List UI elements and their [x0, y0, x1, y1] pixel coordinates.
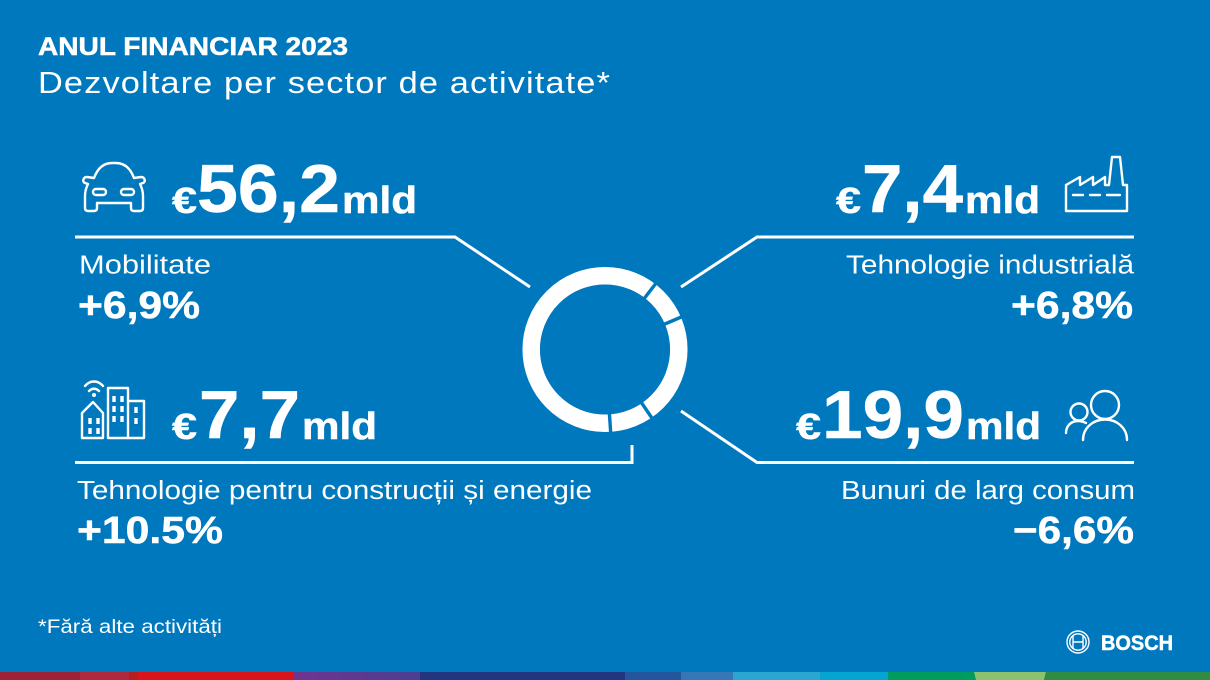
change: building and energy technology: +10.5% [77, 510, 223, 552]
amount: mobility: mld [342, 180, 417, 222]
connector: industrial technology [681, 237, 1134, 287]
amount: industrial technology [836, 151, 1040, 227]
amount: consumer goods: € [796, 406, 821, 447]
icon: factory [1066, 157, 1127, 211]
colour strip [0, 672, 1210, 680]
panel: mobility [75, 151, 530, 327]
amount: building and energy technology [172, 377, 377, 453]
connector: consumer goods [681, 411, 1134, 462]
amount: mobility: € [172, 180, 197, 221]
connector: building and energy technology [75, 445, 632, 462]
amount: building and energy technology: mld [302, 406, 377, 448]
footnote: *Fără alte activități [38, 616, 222, 638]
logo: Bosch [1067, 631, 1173, 655]
icon: people [1066, 391, 1127, 440]
label: industrial technology: Tehnologie industrială [846, 252, 1135, 280]
panel: consumer goods [681, 377, 1135, 552]
change: mobility: +6,9% [78, 285, 200, 327]
amount: industrial technology: € [836, 180, 861, 221]
change: industrial technology: +6,8% [1011, 285, 1133, 327]
title [38, 33, 611, 100]
logo: Bosch: BOSCH [1101, 632, 1173, 655]
amount: building and energy technology: 7,7 [199, 377, 300, 453]
amount: industrial technology: 7,4 [862, 151, 963, 227]
amount: consumer goods [796, 377, 1041, 453]
panel: building and energy technology [75, 377, 632, 552]
amount: consumer goods: 19,9 [822, 377, 964, 453]
change: consumer goods: −6,6% [1013, 510, 1134, 552]
donut chart [531, 272, 693, 437]
icon: smart buildings [82, 382, 144, 438]
amount: building and energy technology: € [172, 406, 197, 447]
amount: consumer goods: mld [966, 406, 1041, 448]
icon: car [83, 163, 145, 211]
label: building and energy technology: Tehnologie pentru construcții și energie [77, 477, 592, 505]
title: Dezvoltare per sector de activitate* [38, 65, 611, 100]
label: mobility: Mobilitate [79, 252, 211, 280]
label: consumer goods: Bunuri de larg consum [841, 477, 1135, 505]
connector: mobility [75, 237, 530, 287]
panel: industrial technology [681, 151, 1135, 327]
title: ANUL FINANCIAR 2023 [38, 33, 348, 61]
amount: mobility: 56,2 [197, 151, 340, 227]
amount: mobility [172, 151, 417, 227]
amount: industrial technology: mld [965, 180, 1040, 222]
